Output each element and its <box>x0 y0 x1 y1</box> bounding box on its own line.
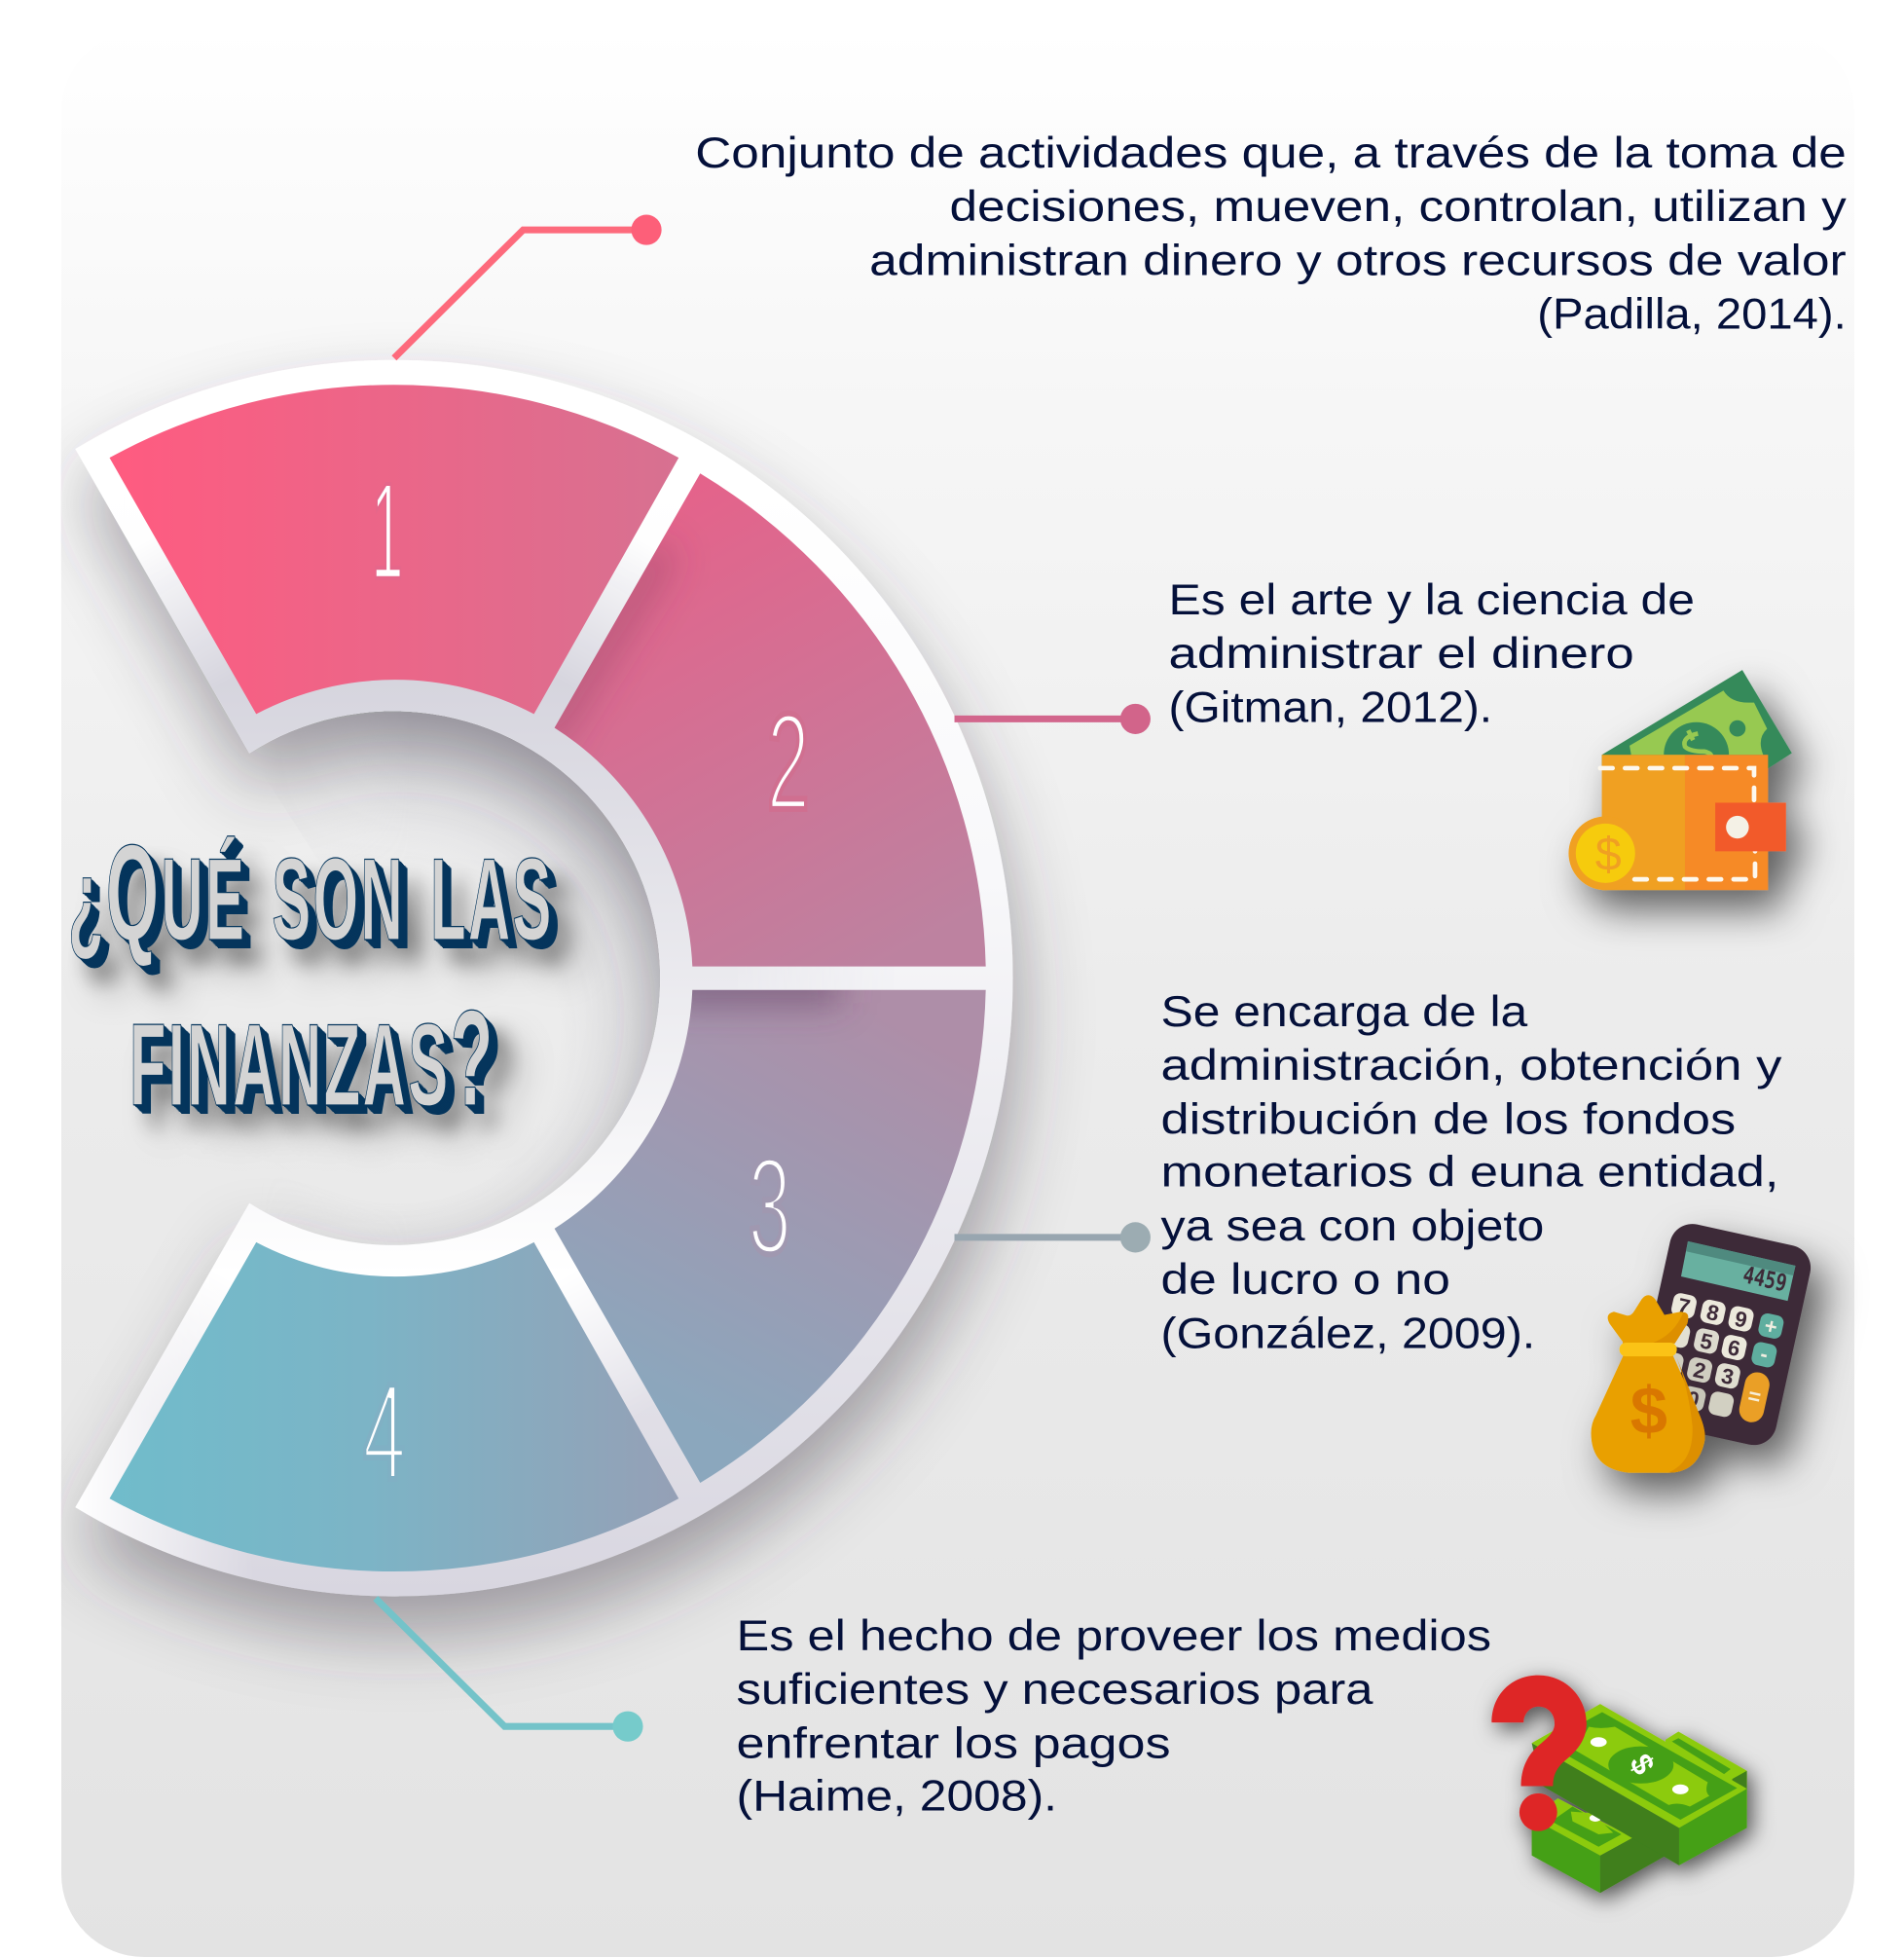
text block 3: de lucro o no <box>1161 1256 1450 1304</box>
icon: stacks of money with red question mark <box>1491 1676 1747 1893</box>
segment 3 <box>555 969 986 1483</box>
icon: calculator and money bag: + <box>1762 1313 1779 1340</box>
number 4: 4 <box>363 1356 406 1509</box>
segment 1 <box>110 385 678 714</box>
text block 3: ya sea con objeto <box>1161 1202 1544 1250</box>
text block 2: Es el arte y la ciencia de <box>1169 576 1695 624</box>
text block 1 <box>695 129 1847 339</box>
chart: segmented ring <box>75 360 1013 1597</box>
title: ¿QUÉ SON LAS <box>68 816 554 969</box>
text block 1: (Padilla, 2014). <box>1537 291 1847 339</box>
ring hole shading <box>321 711 660 1211</box>
text block 3: administración, obtención y <box>1161 1042 1781 1089</box>
text block 3 <box>1161 988 1781 1357</box>
text block 3: (González, 2009). <box>1161 1310 1535 1357</box>
number 3: 3 <box>749 1130 791 1283</box>
icon: calculator and money bag: 7 <box>1675 1293 1693 1319</box>
text block 3: monetarios d euna entidad, <box>1161 1149 1778 1197</box>
ring white band <box>75 360 1013 1597</box>
text block 3: distribución de los fondos <box>1161 1095 1736 1143</box>
icon: calculator and money bag: 9 <box>1733 1307 1749 1333</box>
text block 4: suficientes y necesarios para <box>736 1666 1373 1714</box>
icon: calculator and money bag: 5 <box>1698 1328 1715 1354</box>
connector 2 <box>955 704 1151 734</box>
text block 4 <box>736 1612 1491 1821</box>
title <box>68 816 592 1153</box>
text block 3: Se encarga de la <box>1161 988 1528 1036</box>
text block 2 <box>1169 576 1695 731</box>
segment 4 <box>110 1242 678 1571</box>
icon: stacks of money with red question mark: $ <box>1623 1748 1662 1781</box>
icon: calculator and money bag: 6 <box>1726 1335 1742 1361</box>
icon: calculator and money bag: 0 <box>1685 1386 1702 1413</box>
icon: calculator and money bag: 4459 <box>1740 1261 1789 1297</box>
ring band inner bevel <box>148 565 767 1381</box>
icon: calculator and money bag: = <box>1745 1384 1763 1410</box>
icon: calculator and money bag: 8 <box>1704 1300 1721 1326</box>
ring band lower tip highlight <box>75 1203 394 1597</box>
text block 2: administrar el dinero <box>1169 630 1634 678</box>
icon: wallet with banknote <box>1568 670 1792 890</box>
text block 4: enfrentar los pagos <box>736 1719 1171 1767</box>
icon: calculator and money bag: 3 <box>1719 1363 1736 1389</box>
segment 2 <box>543 473 986 967</box>
number 1: 1 <box>371 454 403 608</box>
icon: calculator and money bag <box>1592 1220 1815 1473</box>
icon: calculator and money bag: $ <box>1630 1373 1667 1448</box>
text block 4: (Haime, 2008). <box>736 1773 1057 1821</box>
text block 1: administran dinero y otros recursos de valor <box>869 237 1847 284</box>
title: FINANZAS? <box>129 981 495 1134</box>
number 2: 2 <box>767 686 810 839</box>
text block 4: Es el hecho de proveer los medios <box>736 1612 1491 1660</box>
icon: wallet with banknote: $ <box>1595 828 1622 880</box>
text block 1: Conjunto de actividades que, a través de la toma de <box>695 129 1847 177</box>
connector 4 <box>376 1599 643 1742</box>
connector 1 <box>394 215 662 358</box>
icon: calculator and money bag: - <box>1758 1342 1771 1367</box>
icon: calculator and money bag: 2 <box>1691 1357 1708 1384</box>
connector 3 <box>955 1222 1151 1252</box>
text block 1: decisiones, mueven, controlan, utilizan y <box>950 183 1847 231</box>
text block 2: (Gitman, 2012). <box>1169 683 1492 731</box>
